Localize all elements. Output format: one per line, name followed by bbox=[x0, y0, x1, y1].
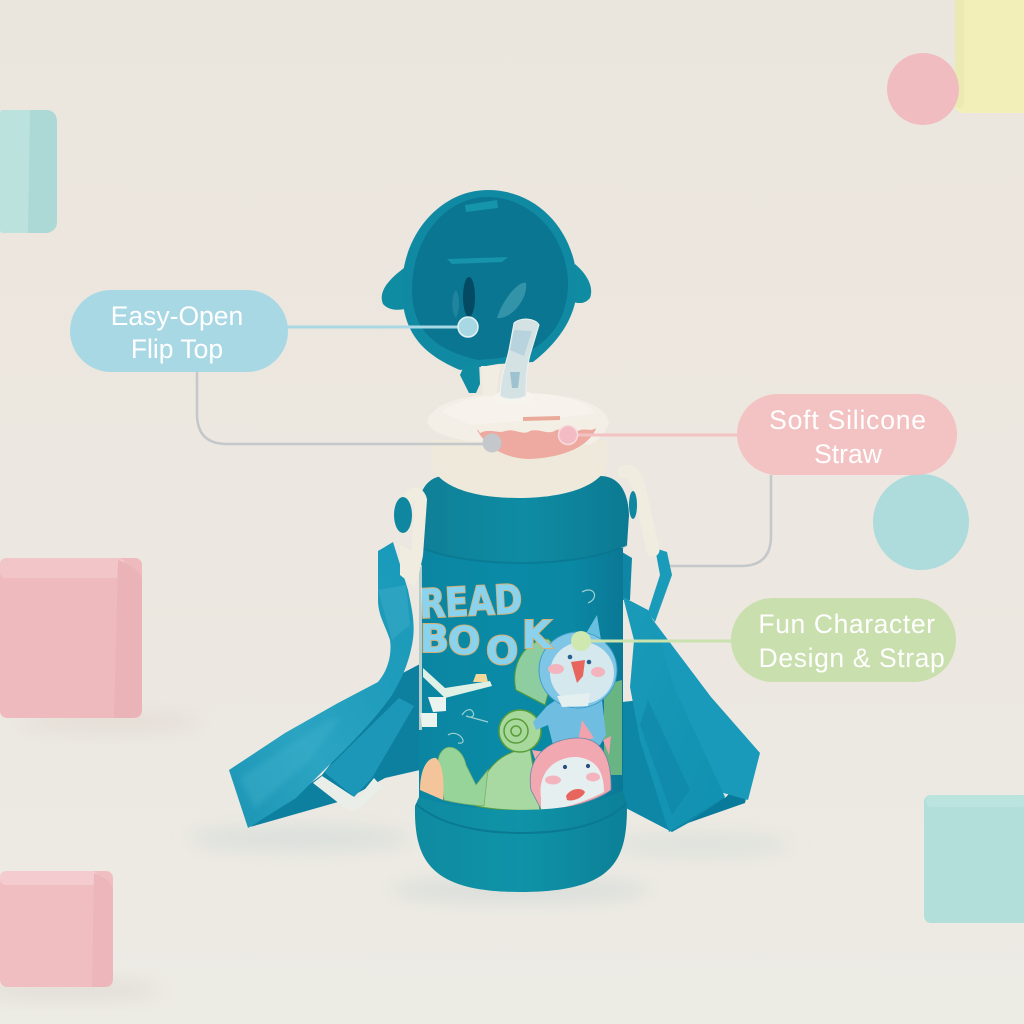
short loop over buckle bbox=[324, 698, 414, 797]
strap: left bbox=[229, 542, 420, 828]
hinge bbox=[481, 366, 500, 396]
lower dark ribbon bbox=[622, 700, 743, 832]
callout: Easy-Open Flip Top: Easy-Open bbox=[111, 301, 243, 331]
callout: Easy-Open Flip Top bbox=[70, 290, 288, 372]
plants bbox=[515, 639, 554, 705]
bottle label artwork bbox=[418, 577, 622, 811]
flip top cap bbox=[382, 190, 591, 393]
character: pink cat bbox=[530, 720, 611, 811]
cream collar bbox=[431, 440, 607, 498]
circle: teal right bbox=[873, 474, 969, 570]
circle: pink top-right bbox=[887, 53, 959, 125]
back ribbon bbox=[250, 664, 420, 827]
flange bbox=[427, 393, 609, 445]
inner ribbon bbox=[623, 597, 725, 832]
bottle highlight bbox=[419, 565, 422, 730]
callout: Soft Silicone Straw bbox=[737, 394, 957, 475]
thin back strip bbox=[622, 552, 632, 600]
bird and scribbles bbox=[423, 668, 492, 698]
connector: straw callout bbox=[558, 426, 738, 444]
character: blue shark bbox=[533, 615, 617, 745]
lid and cap bbox=[427, 319, 609, 498]
callout: Soft Silicone Straw: Straw bbox=[814, 439, 883, 469]
cube: yellow top-right bbox=[955, 0, 1024, 113]
callout: Easy-Open Flip Top: Flip Top bbox=[131, 334, 223, 364]
pink mouth bbox=[477, 426, 597, 459]
main ribbon bbox=[229, 542, 414, 828]
outer ribbon bbox=[648, 620, 760, 800]
connector: character callout bbox=[571, 631, 733, 651]
snail spiral bbox=[499, 710, 541, 752]
straw bbox=[500, 319, 539, 399]
straw base bbox=[494, 390, 534, 404]
READ BOOK text: BOOK bbox=[420, 613, 553, 673]
cube: pink left bbox=[0, 558, 142, 718]
callout: Soft Silicone Straw: Soft Silicone bbox=[769, 405, 927, 435]
bottle body bbox=[419, 548, 623, 810]
connector: flip top callout bbox=[286, 317, 478, 337]
upper band bbox=[648, 548, 672, 622]
callout: Fun Character Design & Strap: Fun Character bbox=[758, 609, 936, 639]
callout: Fun Character Design & Strap: Design & Strap bbox=[759, 643, 945, 673]
connector: grey right path bbox=[670, 475, 771, 566]
cube: teal top-left bbox=[0, 110, 57, 233]
connector: grey lid path bbox=[197, 372, 502, 452]
READ BOOK text: READ bbox=[418, 577, 523, 628]
cube: pink bottom-left bbox=[0, 871, 113, 987]
slider buckle bbox=[313, 776, 382, 810]
bottle bbox=[415, 476, 629, 892]
bottle base bbox=[415, 790, 627, 892]
callout: Fun Character Design & Strap bbox=[731, 598, 956, 682]
buckle: right ring bbox=[624, 471, 653, 550]
READ BOOK text bbox=[418, 577, 553, 673]
cube: teal bottom-right bbox=[924, 795, 1024, 923]
strap: right bbox=[622, 548, 760, 832]
light gap behind bbox=[622, 750, 728, 797]
bottle shoulder dome bbox=[417, 476, 629, 563]
buckle: left ring bbox=[394, 494, 422, 587]
